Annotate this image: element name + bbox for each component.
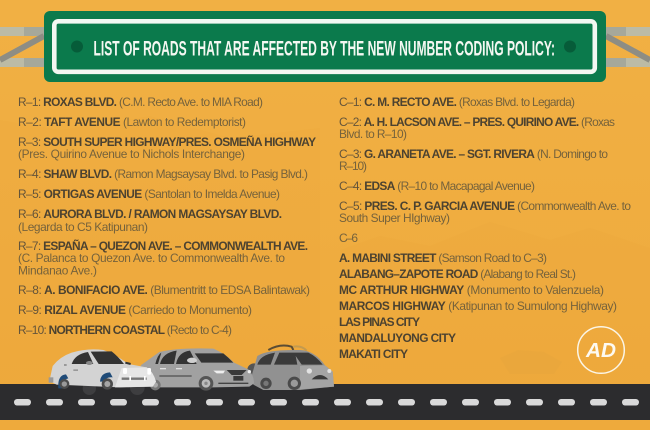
C-3: R–10) [339, 159, 367, 173]
C-2 [339, 115, 615, 141]
AD logo [578, 327, 624, 373]
sign bolt right [564, 40, 576, 52]
R-3: R–3: SOUTH SUPER HIGHWAY/PRES. OSMEÑA HIGHWAY [18, 134, 316, 149]
car: grey SUV [247, 346, 334, 390]
R-9: R–9: RIZAL AVENUE (Carriedo to Monumento) [18, 303, 252, 317]
R-7 [18, 238, 308, 278]
right sign bracket [606, 27, 650, 67]
right column: C roads and cities [339, 95, 631, 361]
Marcos Highway: MARCOS HIGHWAY (Katipunan to Sumulong Highway) [339, 299, 617, 313]
C-5 [339, 199, 631, 225]
sign bolt left [71, 40, 83, 52]
cars [49, 346, 334, 395]
lane dashes [14, 399, 639, 406]
R-7: R–7: ESPAÑA – QUEZON AVE. – COMMONWEALTH AVE. [18, 238, 308, 253]
C-4: C–4: EDSA (R–10 to Macapagal Avenue) [339, 179, 535, 193]
MC Arthur Highway: MC ARTHUR HIGHWAY (Monumento to Valenzuela) [339, 283, 604, 297]
Mandaluyong City: MANDALUYONG CITY [339, 331, 456, 345]
road [0, 384, 650, 420]
AD logo: AD [585, 340, 616, 362]
C-3 [339, 147, 608, 173]
R-2: R–2: TAFT AVENUE (Lawton to Redemptorist) [18, 115, 246, 129]
A. Mabini Street: A. MABINI STREET (Samson Road to C–3) [339, 251, 547, 265]
C-6: C–6 [339, 231, 358, 245]
car: silver sedan [141, 348, 254, 391]
car: white sedan [49, 349, 156, 395]
C-5: South Super HIghway) [339, 211, 450, 225]
R-8: R–8: A. BONIFACIO AVE. (Blumentritt to EDSA Balintawak) [18, 283, 310, 297]
title sign [44, 11, 606, 82]
R-7: Mindanao Ave.) [18, 264, 97, 278]
left sign bracket [0, 27, 44, 67]
C-3: C–3: G. ARANETA AVE. – SGT. RIVERA (N. Domingo to [339, 147, 608, 161]
Alabang-Zapote Road: ALABANG–ZAPOTE ROAD (Alabang to Real St.) [339, 267, 576, 281]
R-6 [18, 207, 282, 234]
Makati City: MAKATI CITY [339, 347, 408, 361]
R-3: (Pres. Quirino Avenue to Nichols Interchange) [18, 147, 245, 161]
R-4: R–4: SHAW BLVD. (Ramon Magsaysay Blvd. to Pasig Blvd.) [18, 167, 308, 181]
R-6: (Legarda to C5 Katipunan) [18, 220, 148, 234]
Las Pinas City: LAS PINAS CITY [339, 315, 420, 329]
C-2: Blvd. to R–10) [339, 127, 407, 141]
C-1: C–1: C. M. RECTO AVE. (Roxas Blvd. to Legarda) [339, 95, 575, 109]
left column: R roads [18, 95, 316, 337]
R-1: R–1: ROXAS BLVD. (C.M. Recto Ave. to MIA Road) [18, 95, 263, 109]
R-5: R–5: ORTIGAS AVENUE (Santolan to Imelda Avenue) [18, 187, 280, 201]
R-7: (C. Palanca to Quezon Ave. to Commonwealth Ave. to [18, 251, 285, 265]
C-5: C–5: PRES. C. P. GARCIA AVENUE (Commonwealth Ave. to [339, 199, 631, 213]
R-3 [18, 134, 316, 161]
R-6: R–6: AURORA BLVD. / RAMON MAGSAYSAY BLVD. [18, 207, 282, 221]
C-2: C–2: A. H. LACSON AVE. – PRES. QUIRINO AVE. (Roxas [339, 115, 615, 129]
R-10: R–10: NORTHERN COASTAL (Recto to C-4) [18, 323, 232, 337]
